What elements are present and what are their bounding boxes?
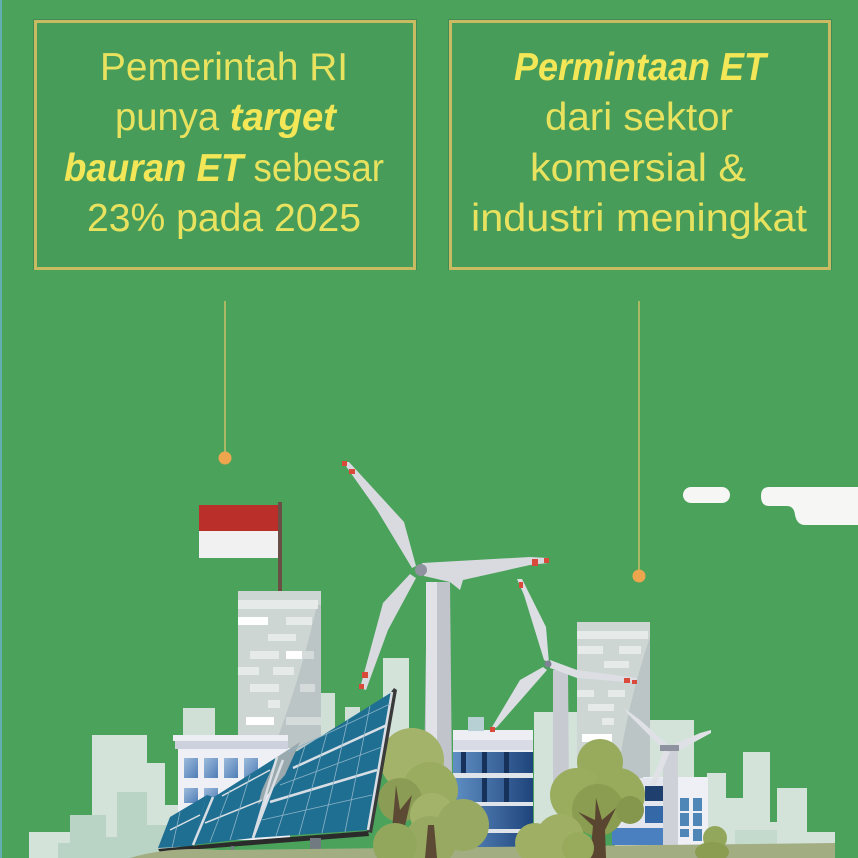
- connector: right pointer: [632, 301, 646, 582]
- text: target statement: 23% pada 2025: [87, 197, 361, 240]
- wind turbine medium: [489, 579, 637, 790]
- ground: [130, 843, 835, 858]
- tower left: [238, 591, 321, 751]
- text: target statement: Pemerintah RI: [100, 46, 348, 89]
- connector: left pointer: [218, 301, 232, 464]
- flag: [199, 502, 282, 592]
- background skyline right: [650, 720, 835, 858]
- building centre blue: [453, 717, 533, 858]
- text: demand statement: [471, 46, 807, 240]
- panel: target bauran ET: [34, 20, 416, 270]
- text: demand statement: industri meningkat: [471, 197, 807, 240]
- solar panels: [158, 688, 397, 858]
- background skyline left: [29, 658, 409, 858]
- text: target statement: punya target: [115, 96, 338, 139]
- text: demand statement: Permintaan ET: [514, 46, 769, 89]
- clouds: [683, 487, 858, 525]
- tree centre large: [515, 739, 729, 858]
- tower right: [534, 622, 650, 832]
- wind turbine small: [624, 708, 711, 858]
- wind turbine large: [342, 461, 549, 780]
- text: demand statement: komersial &: [530, 147, 746, 190]
- trees behind solar panel: [378, 728, 458, 830]
- text: target statement: [64, 46, 384, 240]
- trees centre left: [373, 793, 489, 858]
- panel: permintaan ET: [448, 20, 832, 270]
- building left with windows: [173, 735, 290, 840]
- text: target statement: bauran ET sebesar: [64, 147, 384, 190]
- building right: [612, 777, 708, 858]
- text: demand statement: dari sektor: [545, 96, 733, 139]
